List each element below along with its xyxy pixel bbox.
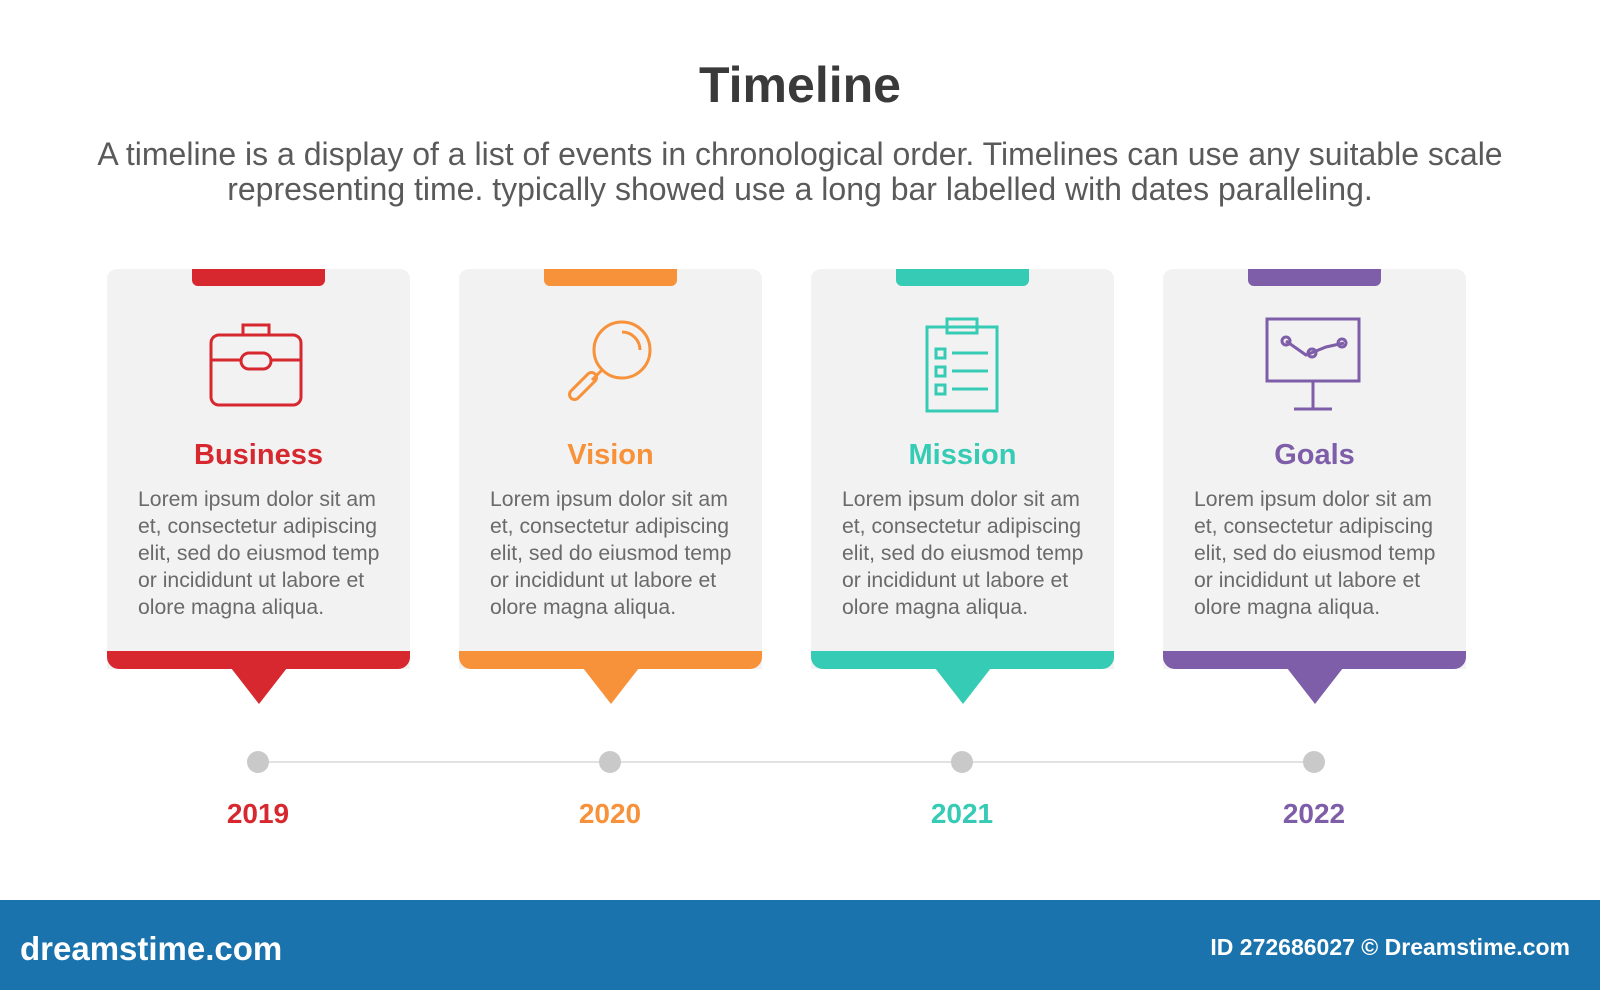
- text: [842, 488, 1083, 619]
- panel: mission: [811, 269, 1114, 704]
- timeline line: [258, 761, 1314, 763]
- text: or incididunt ut labore et: [842, 569, 1068, 592]
- year 2019: 2019: [227, 798, 289, 829]
- dot 2021: [951, 751, 973, 773]
- text: et, consectetur adipiscing: [1194, 515, 1433, 538]
- text: Lorem ipsum dolor sit am: [842, 488, 1080, 511]
- text: et, consectetur adipiscing: [842, 515, 1081, 538]
- text: Lorem ipsum dolor sit am: [1194, 488, 1432, 511]
- text: elit, sed do eiusmod temp: [138, 542, 379, 565]
- text: olore magna aliqua.: [138, 596, 324, 619]
- icon: presentation: [1266, 318, 1360, 410]
- subtitle: representing time. typically showed use a long bar labelled with dates paralleling.: [227, 171, 1373, 207]
- dot 2022: [1303, 751, 1325, 773]
- heading: Goals: [1274, 439, 1355, 471]
- text: [490, 488, 731, 619]
- icon: clipboard: [926, 318, 998, 412]
- text: elit, sed do eiusmod temp: [490, 542, 731, 565]
- subtitle: A timeline is a display of a list of events in chronological order. Timelines can use any suitable scale: [97, 136, 1503, 172]
- text: or incididunt ut labore et: [1194, 569, 1420, 592]
- text: olore magna aliqua.: [842, 596, 1028, 619]
- heading: Mission: [909, 439, 1016, 471]
- dot 2019: [247, 751, 269, 773]
- text: et, consectetur adipiscing: [490, 515, 729, 538]
- year 2020: 2020: [579, 798, 641, 829]
- year 2022: 2022: [1283, 798, 1345, 829]
- panel: business: [107, 269, 410, 704]
- footer id: ID 272686027 © Dreamstime.com: [1210, 934, 1570, 960]
- panel: goals: [1163, 269, 1466, 704]
- subtitle: [97, 136, 1503, 207]
- text: or incididunt ut labore et: [490, 569, 716, 592]
- text: [1194, 488, 1435, 619]
- heading: Business: [194, 439, 323, 471]
- text: elit, sed do eiusmod temp: [1194, 542, 1435, 565]
- text: or incididunt ut labore et: [138, 569, 364, 592]
- footer: [0, 900, 1600, 990]
- heading: Vision: [567, 439, 654, 471]
- text: olore magna aliqua.: [490, 596, 676, 619]
- text: [138, 488, 379, 619]
- title: Timeline: [699, 57, 901, 113]
- text: olore magna aliqua.: [1194, 596, 1380, 619]
- icon: briefcase: [210, 324, 302, 406]
- text: Lorem ipsum dolor sit am: [490, 488, 728, 511]
- text: et, consectetur adipiscing: [138, 515, 377, 538]
- dot 2020: [599, 751, 621, 773]
- text: Lorem ipsum dolor sit am: [138, 488, 376, 511]
- footer logo: dreamstime.com: [20, 930, 282, 967]
- icon: magnifier: [568, 320, 652, 401]
- text: elit, sed do eiusmod temp: [842, 542, 1083, 565]
- panel: vision: [459, 269, 762, 704]
- year 2021: 2021: [931, 798, 993, 829]
